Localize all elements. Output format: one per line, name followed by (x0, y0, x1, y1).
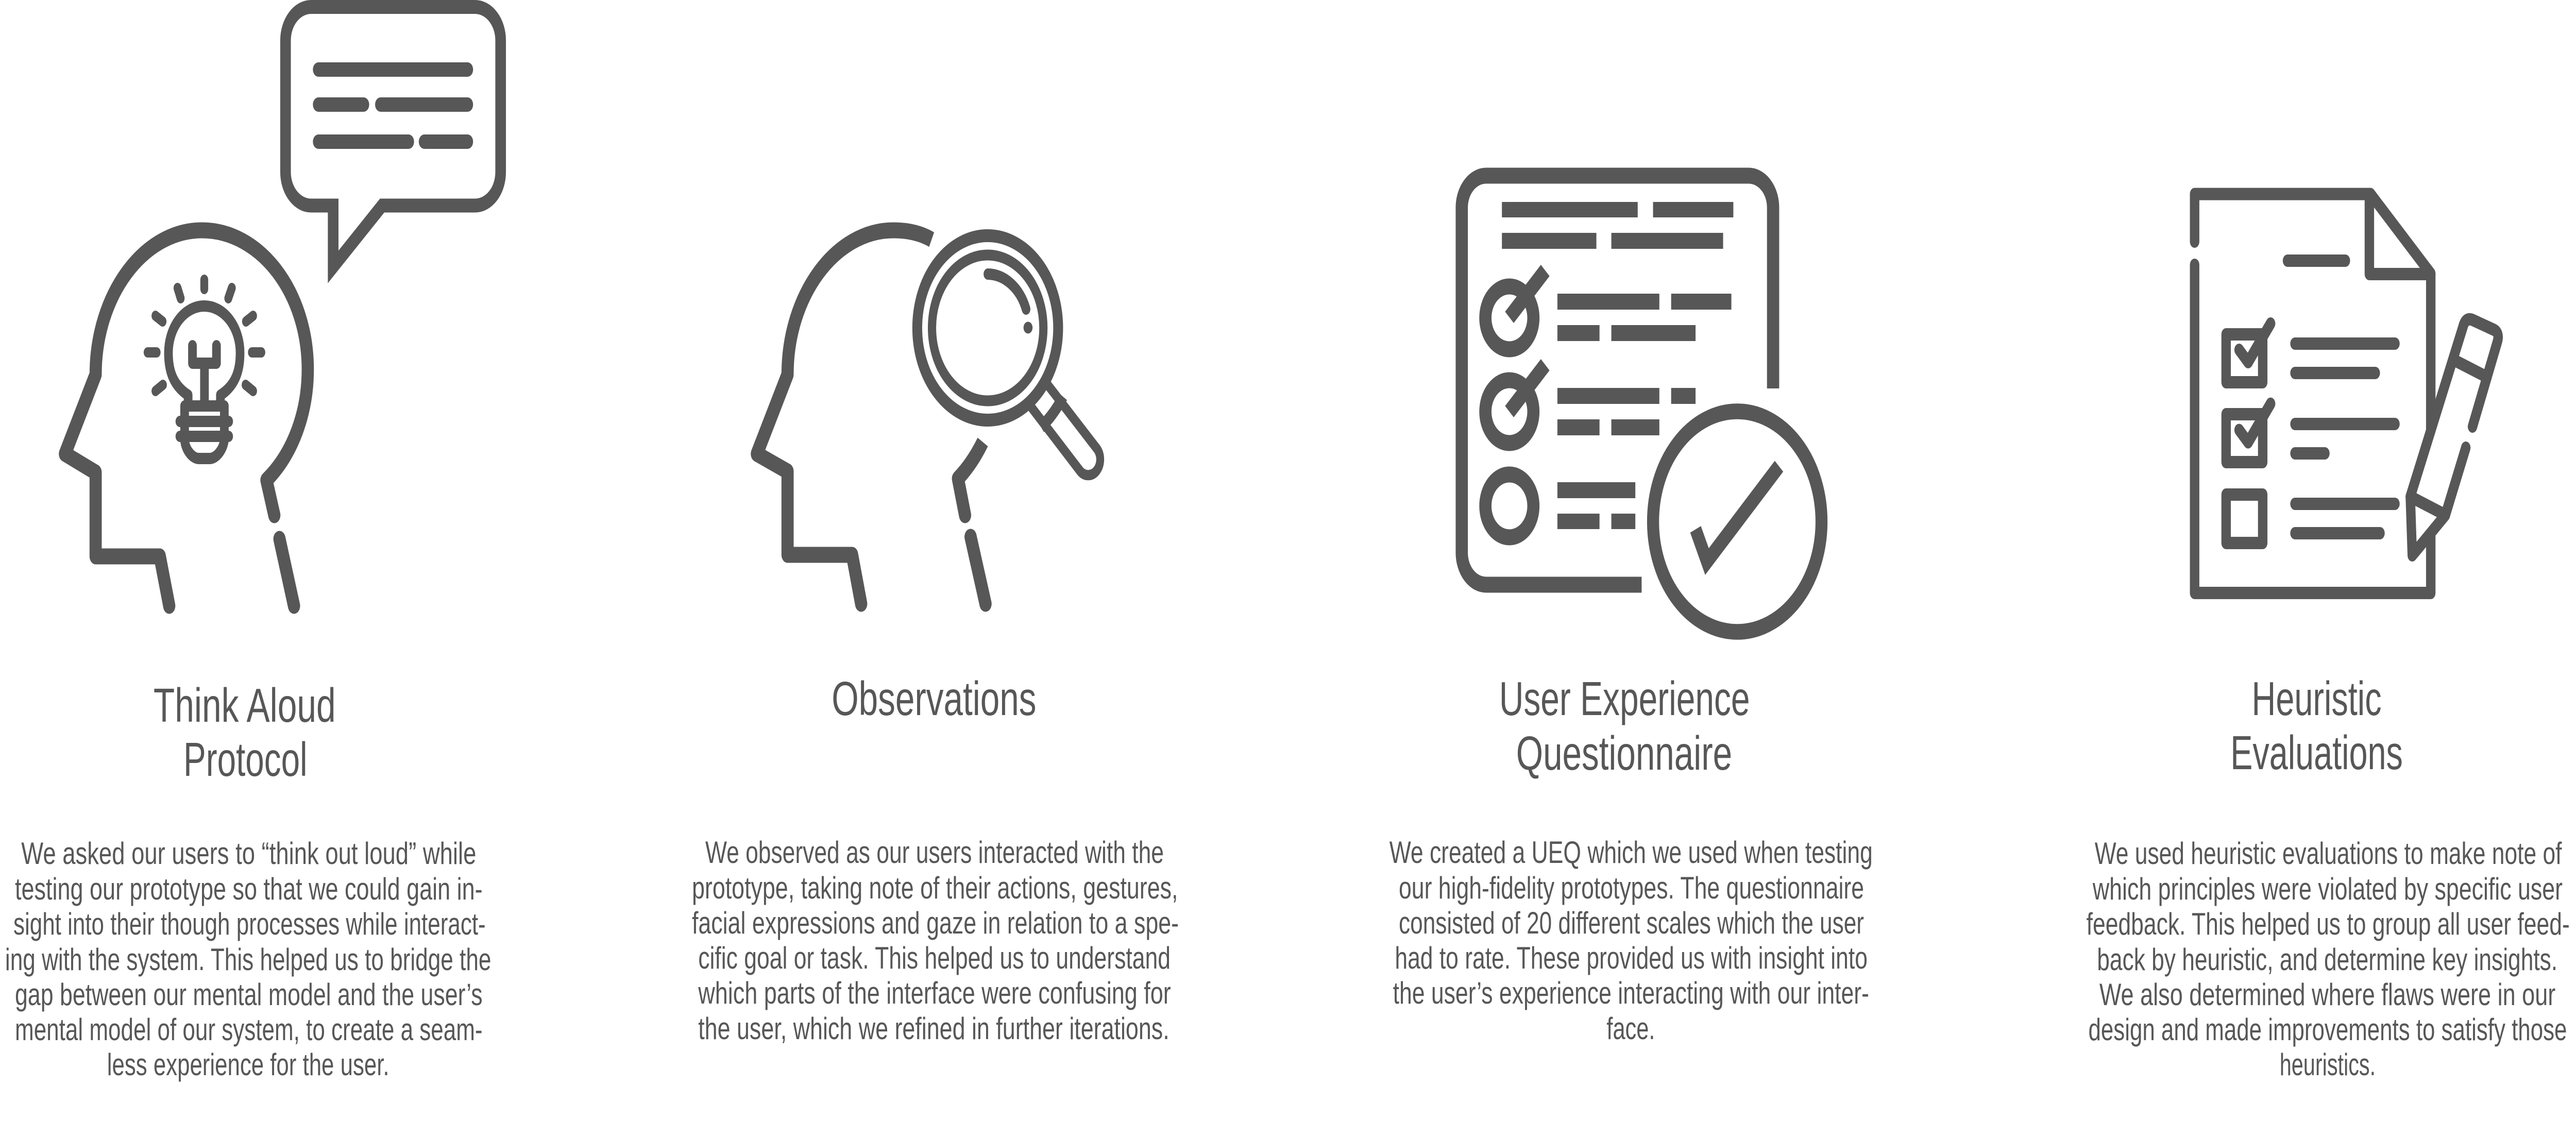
text block: think aloud description: mental model of our system, to create a seam- (15, 1013, 483, 1047)
heading: heuristic evaluations: Heuristic (2252, 672, 2382, 725)
text block: heuristic description: which principles were violated by specific user (2092, 872, 2563, 906)
icon: questionnaire text bars (1502, 202, 1733, 529)
text block: think aloud description: sight into their though processes while interact- (13, 907, 486, 941)
icon: magnifying glass (917, 236, 1100, 475)
icon: document with folded corner (2195, 194, 2431, 593)
text block: questionnaire description: the user’s experience interacting with our inter- (1393, 976, 1869, 1010)
text block: heuristic description: back by heuristic, and determine key insights. (2097, 943, 2557, 977)
icon: light bulb (147, 280, 261, 459)
text block: heuristic description: heuristics. (2280, 1048, 2376, 1082)
text block: think aloud description: We asked our users to “think out loud” while (21, 837, 476, 871)
text block: observations description: We observed as our users interacted with the (705, 836, 1164, 870)
heading: think aloud protocol: Think Aloud (154, 678, 336, 732)
text block: questionnaire description: face. (1606, 1012, 1655, 1046)
icon: radio options with ticks (1485, 270, 1545, 537)
panel: heuristic evaluations (2087, 194, 2570, 1082)
text block: questionnaire description: consisted of 20 different scales which the user (1399, 906, 1864, 940)
icon: speech bubble (285, 7, 501, 267)
text block: heuristic description: feedback. This helped us to group all user feed- (2087, 907, 2570, 941)
panel: think aloud protocol (5, 7, 501, 1082)
heading: think aloud protocol: Protocol (183, 733, 308, 786)
text block: think aloud description (5, 837, 491, 1082)
text block: observations description: which parts of the interface were confusing for (698, 976, 1171, 1010)
text block: observations description: prototype, taking note of their actions, gestures, (692, 871, 1178, 905)
text block: think aloud description: ing with the system. This helped us to bridge the (5, 943, 491, 977)
text block: observations description: facial expressions and gaze in relation to a spe- (692, 906, 1179, 940)
text block: heuristic description: We used heuristic evaluations to make note of (2095, 837, 2562, 871)
heading: observations: Observations (832, 672, 1036, 725)
panel: user experience questionnaire (1389, 176, 1873, 1046)
icon: checklist lines (2295, 344, 2395, 533)
text block: heuristic description: design and made improvements to satisfy those (2088, 1013, 2567, 1047)
text block: think aloud description: less experience for the user. (107, 1048, 389, 1082)
icon: checklist boxes (2226, 324, 2270, 543)
heading: user experience questionnaire: Questionnaire (1516, 726, 1732, 780)
icon: questionnaire sheet frame (1462, 176, 1773, 585)
text block: think aloud description: gap between our mental model and the user’s (15, 978, 483, 1012)
panel: observations (692, 230, 1179, 1046)
heading: heuristic evaluations (2230, 672, 2403, 779)
text block: questionnaire description: had to rate. These provided us with insight into (1395, 941, 1868, 975)
text block: questionnaire description (1389, 836, 1873, 1046)
text block: think aloud description: testing our prototype so that we could gain in- (15, 872, 483, 906)
heading: user experience questionnaire (1499, 672, 1750, 780)
heading: heuristic evaluations: Evaluations (2230, 726, 2403, 779)
text block: observations description: the user, which we refined in further iterations. (698, 1012, 1170, 1046)
icon: head profile (65, 230, 308, 606)
heading: user experience questionnaire: User Experience (1499, 672, 1750, 725)
icon: pencil (2410, 319, 2498, 555)
text block: observations description: cific goal or task. This helped us to understand (698, 941, 1171, 975)
text block: questionnaire description: our high-fidelity prototypes. The questionnaire (1399, 871, 1864, 905)
text block: observations description (692, 836, 1179, 1046)
heading: think aloud protocol (154, 678, 336, 786)
text block: questionnaire description: We created a UEQ which we used when testing (1389, 836, 1873, 870)
icon: head profile with gap (757, 230, 986, 604)
icon: approval badge (1653, 411, 1822, 632)
text block: heuristic description (2087, 837, 2570, 1082)
text block: heuristic description: We also determined where flaws were in our (2099, 978, 2555, 1012)
